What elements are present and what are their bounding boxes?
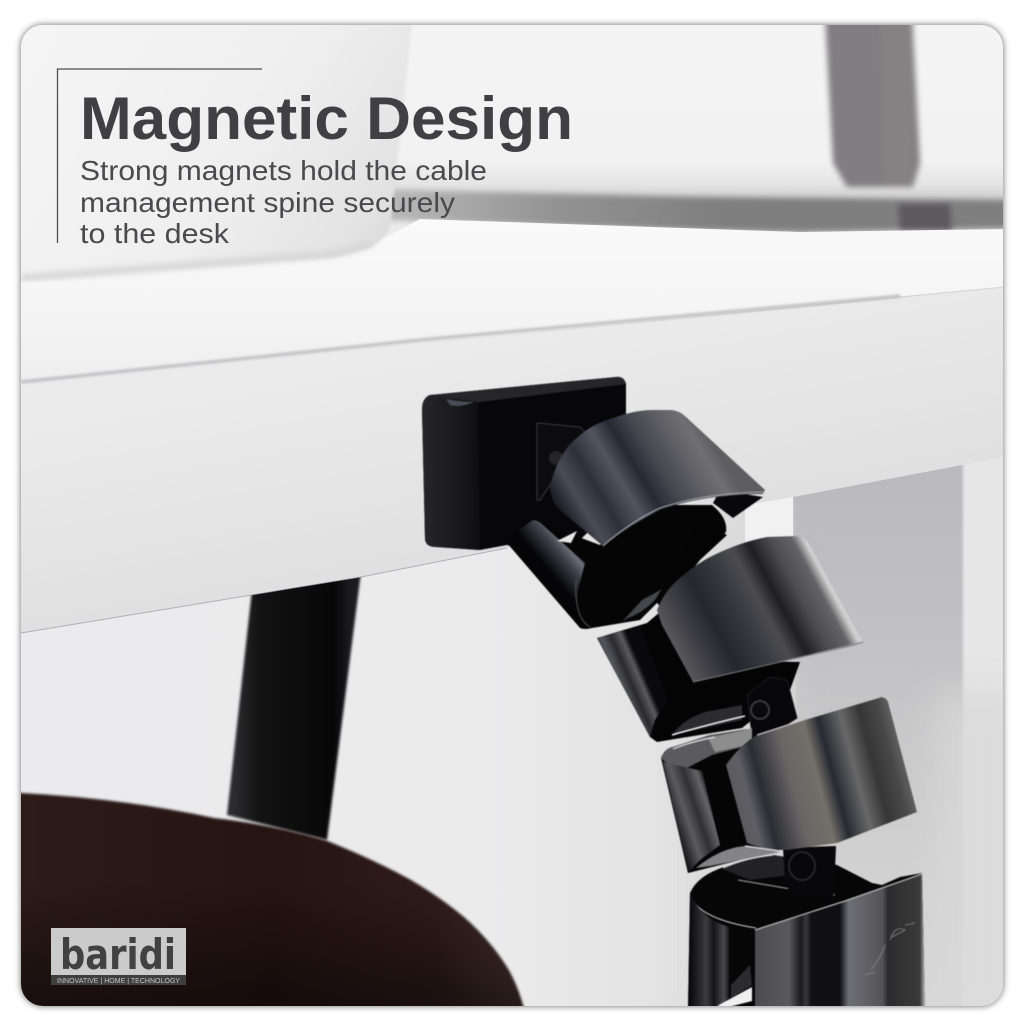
link 2 glossy bar — [597, 626, 668, 737]
heading block — [58, 69, 573, 249]
logo: baridi: INNOVATIVE | HOME | TECHNOLOGY — [57, 976, 180, 985]
blurred monitor stand — [380, 15, 1010, 232]
segment 4 left bar — [688, 893, 729, 1010]
black chair back — [227, 572, 361, 840]
magnetic mount — [422, 377, 626, 560]
desk edge groove — [21, 296, 900, 382]
segment 4 rear shell — [688, 855, 925, 1010]
pivot link A — [747, 677, 797, 742]
right desk leg — [793, 458, 1003, 1006]
pivot link B — [783, 846, 836, 900]
cable spine — [422, 377, 925, 1010]
desk top surface — [21, 219, 1003, 330]
mount top face — [430, 377, 626, 402]
title: Magnetic Design — [80, 85, 573, 152]
segment 4 scratches — [865, 923, 915, 975]
light gap left of leg — [745, 497, 793, 542]
description: management spine securely — [80, 187, 455, 218]
mount bracket — [537, 423, 585, 500]
soft leg highlights — [938, 692, 1003, 1006]
link 1 glossy bar — [520, 520, 586, 598]
description: Strong magnets hold the cable — [80, 155, 487, 186]
bracket rule — [58, 69, 262, 243]
desk underside shadow line — [21, 548, 507, 633]
upper wall — [21, 25, 1003, 200]
lower body of link 3 — [661, 716, 780, 873]
spine segment 3 — [726, 697, 917, 851]
description — [80, 155, 487, 249]
lower body of link 2 — [597, 520, 800, 742]
monitor bottom lip — [21, 243, 372, 278]
logo: baridi: baridi — [60, 930, 176, 979]
blurred monitor box — [21, 25, 411, 258]
spine segment 4 — [688, 874, 925, 1010]
spine segment 2 — [657, 536, 863, 682]
spine segment 1 — [550, 410, 765, 546]
segment 4 front face — [755, 875, 925, 1010]
desk front edge — [0, 287, 1010, 637]
mount side face — [422, 395, 480, 550]
description: to the desk — [80, 218, 230, 249]
chair seat — [0, 792, 525, 1012]
lower body of link 1 — [507, 505, 726, 629]
link 3 glossy bar — [663, 762, 720, 873]
